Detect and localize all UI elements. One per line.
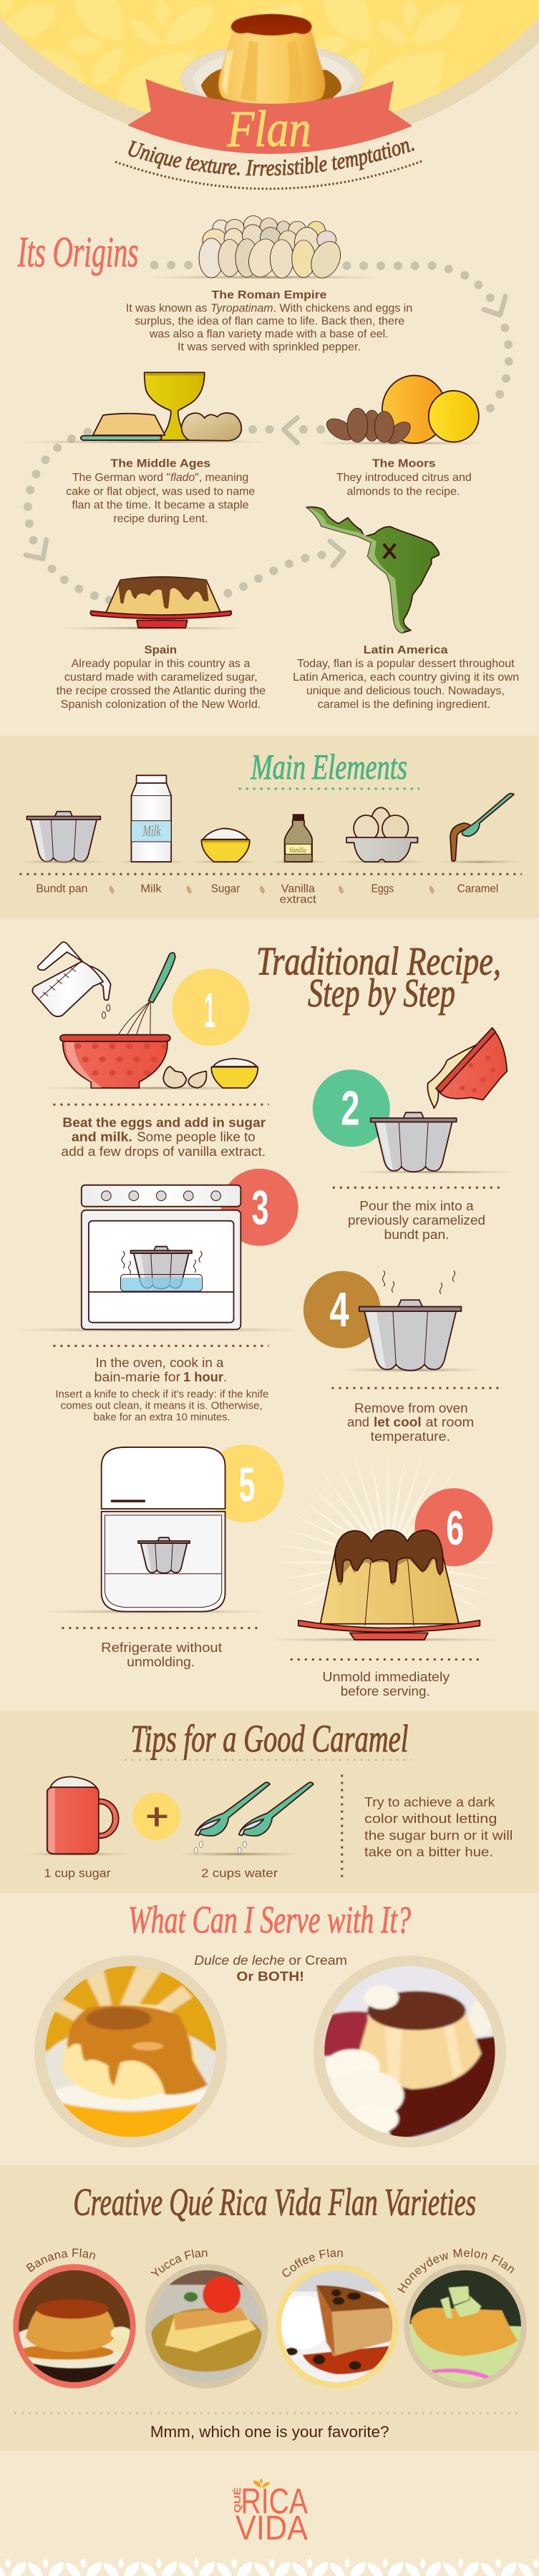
text: step 4 (347, 1401, 474, 1444)
text: The Middle Ages: cake or flat object, was used to name (66, 485, 255, 498)
variety labels: Yucca Flan (150, 2249, 208, 2276)
photo: flan with dulce de leche (34, 1955, 227, 2147)
text: The Middle Ages (66, 458, 255, 525)
text: The Middle Ages: recipe during Lent. (113, 512, 208, 525)
variety labels: Banana Flan (26, 2248, 95, 2272)
text: The Moors (336, 458, 472, 498)
text: step 3: bake for an extra 10 minutes. (94, 1411, 230, 1423)
text: The Middle Ages: The German word "flado", meaning (72, 472, 248, 484)
text: step 2: previously caramelized (348, 1213, 485, 1228)
icon: step 2 pouring bowl (357, 1028, 512, 1173)
icon: goblet, flan and bread (21, 372, 268, 443)
logo: Qué Rica Vida (232, 2479, 309, 2547)
ingredient labels: Eggs (372, 883, 394, 895)
text: The Moors: The Moors (372, 458, 436, 470)
text: Latin America: Latin America (364, 644, 448, 656)
text: serving suggestion: Or BOTH! (236, 1970, 304, 1984)
text: step 2: bundt pan. (384, 1228, 450, 1242)
text: serving suggestion: or Cream (288, 1953, 347, 1968)
text: closing question: Mmm, which one is your favorite? (150, 2423, 389, 2441)
ingredient labels: Milk (140, 883, 162, 895)
decoration: rays behind flan (276, 1450, 500, 1616)
panel: varieties band (0, 2165, 539, 2451)
text: Latin America: caramel is the defining ingredient. (318, 699, 490, 711)
icon: step 1 jug, whisk and bowl (32, 942, 265, 1089)
icon: citrus and almonds (316, 376, 485, 447)
variety labels: Coffee Flan (282, 2249, 343, 2277)
heading: Traditional Recipe, Step by Step (256, 940, 501, 1016)
icon: Spanish flan on red stand (62, 577, 244, 629)
ingredient labels: Vanilla (281, 883, 315, 895)
logo: Qué Rica Vida: QUÉ (232, 2487, 243, 2513)
text: step 1 (61, 1116, 266, 1159)
text: caramel tip (364, 1795, 513, 1860)
footer: leaf border (0, 2558, 539, 2576)
text: Spain: custard made with caramelized sugar, (64, 671, 258, 684)
logo: Qué Rica Vida: RICA (241, 2481, 309, 2521)
text: The Roman Empire (126, 289, 412, 353)
badge: step 2 (313, 1069, 390, 1147)
ingredient labels: Sugar (211, 883, 241, 895)
text: serving suggestion (194, 1953, 347, 1984)
badge: step 4 (304, 1271, 381, 1348)
text: step 6: before serving. (341, 1684, 430, 1698)
text: step 4: at room (425, 1415, 474, 1429)
text: The Moors: They introduced citrus and (336, 472, 472, 484)
badge: step 6 (414, 1488, 492, 1566)
text: Spain (57, 644, 266, 711)
text: step 3: 1 hour (183, 1370, 223, 1384)
photo: flan with cream (314, 1955, 506, 2147)
text: step 3: comes out clean, it means it is. Otherwise, (61, 1400, 263, 1411)
caption: quantities (44, 1867, 278, 1880)
heading: What Can I Serve with It?: What Can I Serve with It? (128, 1898, 411, 1941)
text: step 4: Remove from oven (354, 1401, 468, 1415)
title: Flan: Flan (227, 100, 311, 157)
text: caramel tip: take on a bitter hue. (364, 1845, 493, 1860)
text: step 5: Refrigerate without (101, 1641, 222, 1655)
label: milk carton: Milk (142, 822, 161, 840)
text: The Roman Empire: surplus, the idea of flan came to life. Back then, there (135, 315, 404, 327)
text: step 2 (348, 1199, 485, 1242)
text: step 1: and milk. (72, 1130, 132, 1144)
text: step 5 (101, 1641, 222, 1669)
icon: unmolded flan on plate (268, 1530, 502, 1641)
text: step 3 (55, 1356, 268, 1423)
photo: honeydew melon flan (404, 2264, 528, 2388)
text: step 4: temperature. (371, 1429, 450, 1444)
text: Latin America (293, 644, 519, 711)
text: step 6: Unmold immediately (322, 1670, 450, 1684)
icon: step 4 cooling bundt pan (344, 1270, 480, 1371)
icon set: milk, sugar, vanilla, eggs, caramel (21, 775, 519, 863)
ingredient labels: extract (280, 894, 316, 906)
text: Spain: Already popular in this country as a (72, 658, 250, 670)
text: Latin America: unique and delicious touch. Nowadays, (306, 685, 505, 697)
photo: banana flan (7, 2264, 141, 2388)
text: Latin America: Today, flan is a popular dessert throughout (297, 658, 515, 670)
text: Spain: Spanish colonization of the New World. (61, 699, 261, 711)
panel: main elements band (0, 736, 539, 918)
ingredient labels: Bundt pan (36, 883, 87, 895)
badge: step 6: 6 (446, 1501, 464, 1555)
icon: map of Latin America (306, 507, 439, 633)
text: The Roman Empire: It was known as Tyropatinam. With chickens and eggs in (126, 302, 412, 315)
text: step 3: . (223, 1370, 227, 1384)
icon: bundt pan (27, 812, 100, 862)
icon: fridge with bundt pan (44, 1447, 265, 1613)
photo: coffee flan (275, 2264, 399, 2388)
logo: Qué Rica Vida: VIDA (235, 2509, 308, 2547)
text: The Middle Ages: flan at the time. It became a staple (72, 500, 249, 511)
text: serving suggestion: Dulce de leche (194, 1953, 285, 1968)
text: caramel tip: the sugar burn or it will (364, 1828, 513, 1842)
text: The Moors: almonds to the recipe. (346, 485, 460, 498)
text: caramel tip: Try to achieve a dark (364, 1795, 496, 1809)
badge: step 1 (172, 968, 249, 1046)
text: The Roman Empire: was also a flan variety made with a base of eel. (149, 328, 389, 340)
badge: step 5 (205, 1444, 283, 1522)
text: step 3: Insert a knife to check if it's ready: if the knife (55, 1389, 268, 1400)
photo: yucca flan (145, 2264, 268, 2388)
text: Spain: the recipe crossed the Atlantic during the (57, 685, 266, 697)
icon: cup of sugar plus spoons of water (27, 1777, 314, 1855)
badge: step 4: 4 (329, 1283, 349, 1337)
text: The Roman Empire: It was served with sprinkled pepper. (178, 341, 361, 353)
text: step 1: Some people like to (137, 1130, 256, 1144)
variety labels (26, 2248, 514, 2293)
text: step 4: and (347, 1415, 369, 1429)
variety labels: Honeydew Melon Flan (397, 2249, 514, 2293)
text: step 1: Beat the eggs and add in sugar (62, 1116, 266, 1130)
text: step 1: add a few drops of vanilla extract. (61, 1144, 266, 1159)
heading: Main Elements: Main Elements (251, 747, 407, 787)
text: caramel tip: color without letting (364, 1812, 497, 1826)
icon: step 2 bundt pan (371, 1112, 457, 1172)
icon: fridge bundt pan (138, 1537, 190, 1573)
panel: header circle (0, 0, 539, 125)
icon: pile of eggs (151, 216, 382, 281)
caption: quantities: 1 cup sugar (44, 1867, 111, 1880)
tagline: Unique texture. Irresistible temptation. (128, 140, 414, 176)
text: step 3: bain-marie for (94, 1370, 180, 1384)
timeline path of dots and chevrons (24, 261, 513, 604)
photo: flan on plate (180, 14, 364, 104)
badge: step 3 (221, 1169, 298, 1246)
caption: quantities: 2 cups water (201, 1867, 278, 1880)
label: vanilla bottle: Vanilla (289, 846, 306, 855)
badge: step 5: 5 (239, 1458, 255, 1512)
text: step 4: let cool (374, 1415, 422, 1429)
ingredient labels (36, 883, 498, 906)
text: The Roman Empire: The Roman Empire (212, 289, 327, 301)
badge: step 2: 2 (341, 1082, 359, 1136)
badge: step 1: 1 (204, 983, 215, 1038)
badge: step 3: 3 (252, 1180, 269, 1235)
heading: Traditional Recipe, Step by Step: Step by Step (308, 971, 455, 1016)
text: step 2: Pour the mix into a (359, 1199, 475, 1213)
ingredient labels: Caramel (457, 883, 498, 895)
text: step 3: In the oven, cook in a (96, 1356, 225, 1370)
text: step 6 (322, 1670, 450, 1698)
heading: Its Origins: Its Origins (17, 228, 139, 276)
panel: caramel tips band (0, 1711, 539, 1892)
text: Latin America: Latin America, each country giving it its own (293, 671, 519, 684)
text: Spain: Spain (145, 644, 177, 656)
text: The Middle Ages: The Middle Ages (110, 458, 210, 470)
heading: Tips for a Good Caramel: Tips for a Good Caramel (130, 1717, 408, 1760)
icon: oven with bain-marie (14, 1185, 301, 1331)
banner: coral ribbon (127, 79, 412, 154)
text: step 5: unmolding. (127, 1655, 195, 1669)
